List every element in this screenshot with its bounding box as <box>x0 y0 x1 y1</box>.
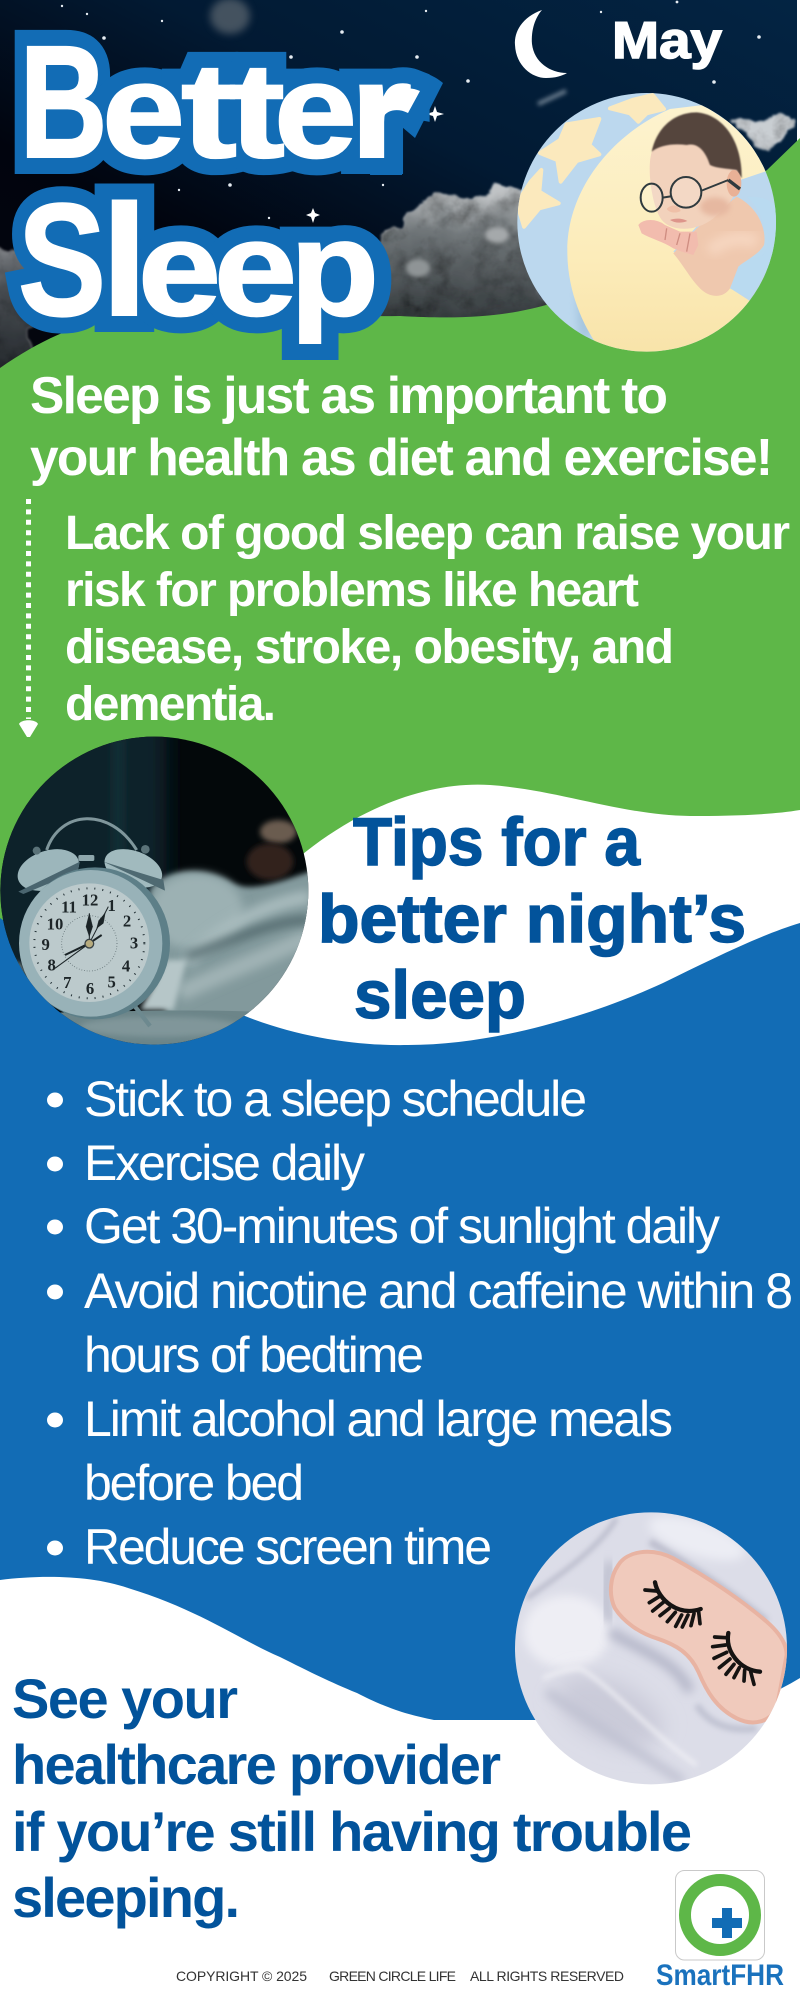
clock numerals: 12 <box>82 891 98 910</box>
body <box>673 197 765 296</box>
moon pillow <box>567 105 767 357</box>
arrow: dotted down arrow <box>19 499 38 737</box>
clock numerals: 5 <box>108 972 116 991</box>
tips list: Reduce screen time <box>84 1519 492 1575</box>
eyelashes left <box>645 1582 701 1627</box>
eyelashes right <box>713 1633 760 1684</box>
blue panel <box>0 918 800 1720</box>
title outline: Better: e <box>102 35 185 186</box>
title fill: Sleep: S <box>18 170 106 349</box>
table <box>60 1010 250 1045</box>
title outline tip of r <box>370 70 443 175</box>
intro statement <box>30 366 773 486</box>
risk paragraph <box>65 507 790 731</box>
clock numerals <box>42 891 138 998</box>
photo: satin sleep mask on sheets <box>510 1505 795 1790</box>
title outline: Sleep: e <box>138 193 221 344</box>
provider call to action: See your <box>12 1667 238 1730</box>
clock numerals: 3 <box>130 934 138 953</box>
clock numerals: 6 <box>86 979 94 998</box>
provider call to action: healthcare provider <box>12 1733 501 1796</box>
title: Better Sleep <box>18 12 443 349</box>
provider call to action <box>12 1667 692 1929</box>
heading: tips: Tips for a <box>353 804 641 880</box>
clock numerals: 9 <box>42 935 50 954</box>
icon: crescent moon <box>515 10 567 78</box>
hands <box>638 220 698 255</box>
tips list: Get 30-minutes of sunlight daily <box>84 1198 720 1254</box>
title fill: Better: t <box>181 35 237 186</box>
sleeper head <box>260 820 297 843</box>
bells and handle <box>47 819 137 850</box>
title fill: Sleep: e <box>214 193 297 344</box>
title fill: Better: B <box>20 12 108 191</box>
logo: SmartFHR: SmartFHR <box>656 1959 784 1992</box>
clock numerals: 7 <box>63 973 71 992</box>
heading: tips: sleep <box>354 957 526 1033</box>
glasses <box>641 177 740 212</box>
stars <box>520 95 664 227</box>
title outline: Sleep: p <box>290 193 379 344</box>
tips list: Limit alcohol and large meals <box>84 1391 673 1447</box>
leg <box>134 1006 152 1028</box>
title fill: Sleep: e <box>138 193 221 344</box>
clock numerals: 2 <box>123 911 131 930</box>
photo: baby sleeping on moon <box>517 93 776 352</box>
copyright footer: GREEN CIRCLE LIFE <box>329 1968 456 1984</box>
night sky background <box>0 0 797 400</box>
risk paragraph: risk for problems like heart <box>65 564 639 617</box>
white wave behind tips heading <box>250 785 800 1060</box>
tips list <box>47 1071 793 1575</box>
clock numerals: 11 <box>61 898 77 917</box>
tips list: before bed <box>84 1455 304 1511</box>
title outline: Sleep: l <box>101 173 148 349</box>
pillow and duvet <box>150 870 315 1017</box>
provider call to action: sleeping. <box>12 1866 240 1929</box>
intro statement second line: your health as diet and exercise! <box>30 428 773 486</box>
title fill: arm of r <box>384 88 420 116</box>
title outline: Sleep: e <box>214 193 297 344</box>
title fill: Better: t <box>229 35 285 186</box>
copyright footer <box>176 1968 624 1984</box>
head <box>650 144 740 229</box>
clock numerals: 4 <box>122 956 131 975</box>
tips list: Avoid nicotine and caffeine within 8 <box>84 1263 793 1319</box>
tips list: hours of bedtime <box>84 1327 424 1383</box>
title fill: Better: e <box>102 35 185 186</box>
heading: tips <box>318 804 746 1033</box>
title outline: Better: B <box>20 12 108 191</box>
title outline: Better: t <box>229 35 285 186</box>
risk paragraph: dementia. <box>65 678 276 731</box>
title fill: Sleep: l <box>101 173 148 349</box>
intro statement: Sleep is just as important to <box>30 366 668 424</box>
title outline: Better: e <box>274 35 357 186</box>
logo: SmartFHR <box>656 1870 784 1992</box>
tips list: Stick to a sleep schedule <box>84 1071 587 1127</box>
clock body <box>20 867 170 1019</box>
month label: May <box>612 12 722 70</box>
copyright footer: ALL RIGHTS RESERVED <box>470 1968 624 1984</box>
white bottom panel <box>0 1577 800 2000</box>
title outline: Better: r <box>350 35 412 186</box>
copyright footer: COPYRIGHT © 2025 <box>176 1968 307 1984</box>
title outline: Sleep: S <box>18 170 106 349</box>
risk paragraph: Lack of good sleep can raise your <box>65 507 790 560</box>
title fill: Sleep: p <box>290 193 379 344</box>
tips list: Exercise daily <box>84 1135 365 1191</box>
clock numerals: 8 <box>48 956 56 975</box>
blanket <box>730 206 776 290</box>
mask <box>611 1552 787 1722</box>
risk paragraph: disease, stroke, obesity, and <box>65 621 674 674</box>
clock numerals: 10 <box>47 914 63 933</box>
photo: alarm clock beside sleeper <box>0 717 315 1050</box>
clock hands <box>55 907 108 968</box>
title outline: Better: t <box>181 35 237 186</box>
green wave panel <box>0 138 800 1000</box>
title fill: Better: r <box>350 35 412 186</box>
hair <box>652 112 742 178</box>
heading: tips: better night’s <box>318 881 746 957</box>
clock numerals: 1 <box>108 896 116 915</box>
provider call to action: if you’re still having trouble <box>12 1800 692 1863</box>
title fill: Better: e <box>274 35 357 186</box>
